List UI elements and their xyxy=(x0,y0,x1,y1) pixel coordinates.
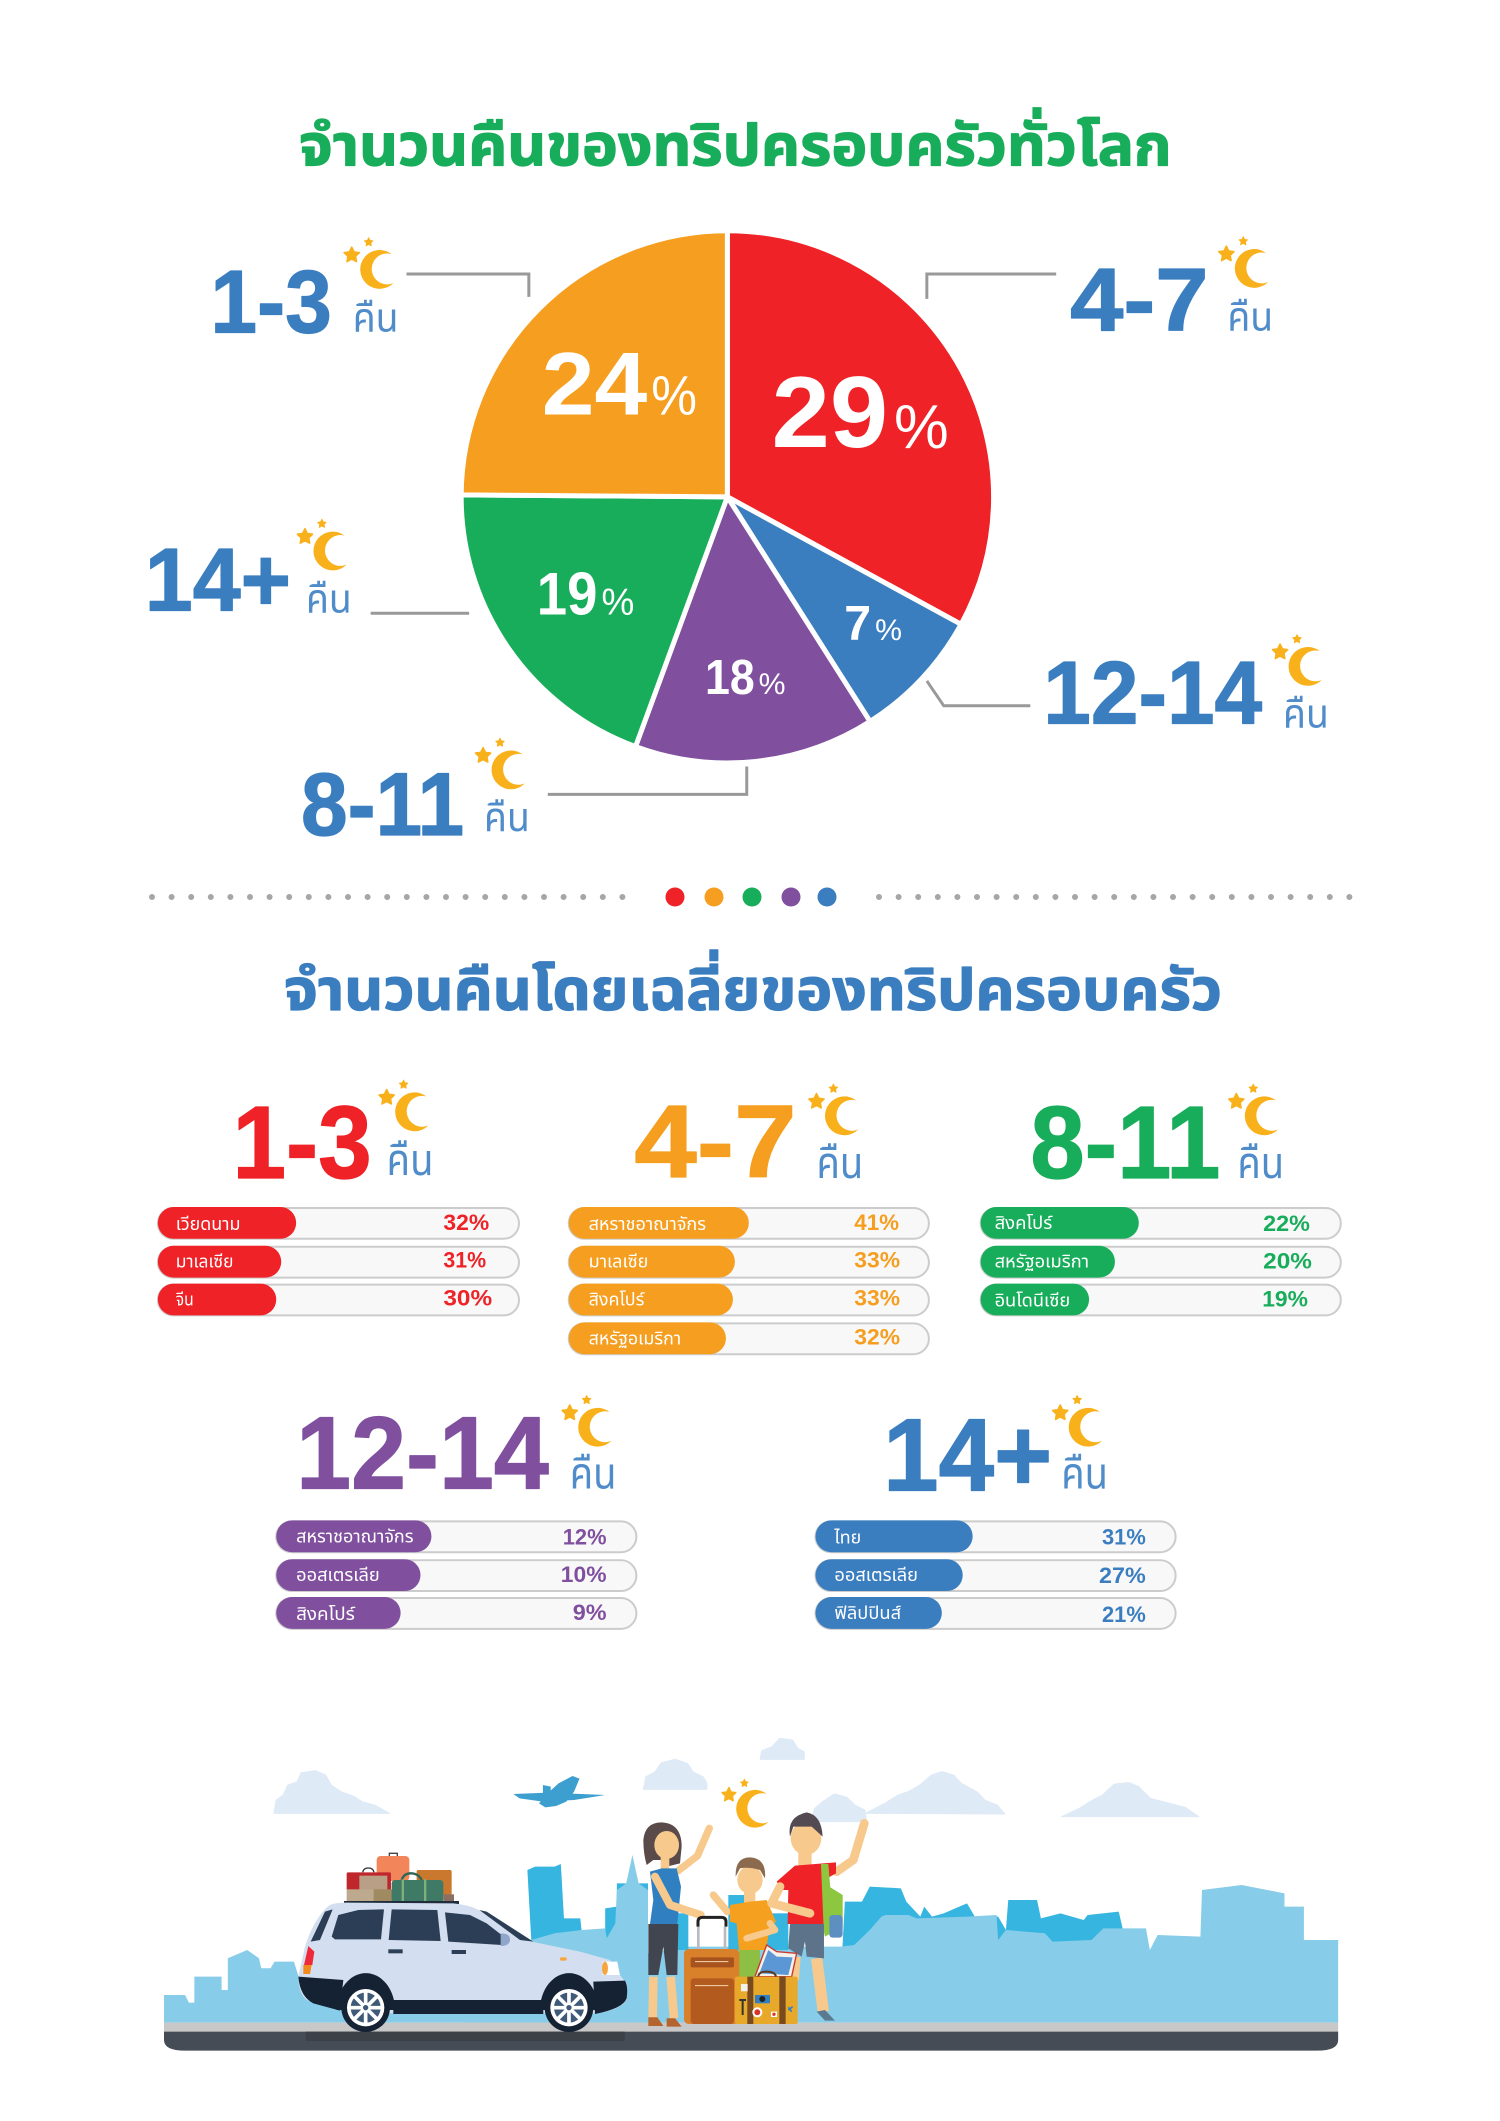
pie label: 4-7 nights xyxy=(1070,237,1273,350)
bar: USA 32% xyxy=(569,1322,929,1354)
family with suitcases xyxy=(643,1779,864,2027)
bar: Australia 10%: ออสเตรเลีย xyxy=(296,1565,380,1585)
leader line: 8-11 xyxy=(548,766,747,794)
panel: 8-11 nights countries xyxy=(981,1084,1341,1315)
road xyxy=(164,2023,1338,2051)
bar: China 30%: จีน xyxy=(175,1289,194,1309)
car bumpers and sill xyxy=(298,1977,627,2014)
heading: 4-7 nights: 4-7 xyxy=(634,1083,797,1199)
bar: Malaysia 33% xyxy=(569,1246,929,1278)
roof luggage xyxy=(344,1853,459,1906)
bar: UK 12% xyxy=(276,1520,636,1552)
pie value: 29%: 29 xyxy=(772,355,888,469)
woman xyxy=(643,1822,709,2027)
pie label: 8-11 nights: 8-11 xyxy=(301,754,464,854)
title: average nights per family trip: จำนวนคืนโดยเฉลี่ยของทริปครอบครัว xyxy=(284,949,1222,1023)
bar: Singapore 33%: สิงคโปร์ xyxy=(589,1289,645,1309)
bar: Malaysia 33%: 33% xyxy=(854,1248,900,1273)
pie label: 4-7 nights: 4-7 xyxy=(1070,250,1208,350)
bar: China 30% xyxy=(158,1284,519,1315)
bar: Indonesia 19%: 19% xyxy=(1262,1286,1308,1311)
bar: USA 20%: 20% xyxy=(1263,1249,1312,1274)
title: global family trip nights: จำนวนคืนของทริปครอบครัวทั่วโลก xyxy=(299,108,1172,179)
heading: 12-14 nights: คืน xyxy=(570,1450,617,1499)
bar: Indonesia 19% xyxy=(981,1284,1341,1315)
bar: Singapore 9% xyxy=(276,1597,636,1629)
bar: Malaysia 31%: มาเลเซีย xyxy=(176,1252,233,1272)
background buildings behind family xyxy=(677,1895,788,1950)
panel: 14+ nights countries xyxy=(815,1396,1176,1629)
car windows xyxy=(311,1909,533,1945)
yellow suitcase with map xyxy=(735,1945,798,2024)
bar: Australia 10% xyxy=(276,1559,636,1591)
skyline: light buildings xyxy=(164,1855,1338,2023)
pie value: 18%: % xyxy=(759,668,786,701)
bar: Singapore 33% xyxy=(569,1284,929,1315)
coloured divider dots xyxy=(666,888,836,906)
bar: UK 41%: สหราชอาณาจักร xyxy=(589,1214,706,1234)
pie label: 14+ nights xyxy=(145,519,352,629)
bar: Philippines 21% xyxy=(815,1597,1176,1629)
bar: Singapore 22%: สิงคโปร์ xyxy=(995,1213,1053,1233)
bar: USA 32%: 32% xyxy=(854,1324,900,1349)
man xyxy=(772,1812,864,2021)
bar: China 30%: 30% xyxy=(443,1285,492,1310)
front wheel xyxy=(540,1973,598,2032)
bar: Singapore 22%: 22% xyxy=(1263,1211,1310,1236)
heading: 8-11 nights: คืน xyxy=(1237,1139,1284,1188)
heading: 4-7 nights xyxy=(634,1083,863,1199)
bar: USA 20% xyxy=(981,1246,1341,1278)
icon: airplane xyxy=(513,1776,605,1807)
bar: UK 41%: 41% xyxy=(854,1210,899,1235)
bar: Malaysia 33%: มาเลเซีย xyxy=(589,1252,648,1272)
pie value: 29%: % xyxy=(894,393,949,462)
bar: Thailand 31%: 31% xyxy=(1102,1524,1146,1549)
pie value: 24% xyxy=(542,333,697,433)
bar: Vietnam 32%: เวียดนาม xyxy=(176,1214,240,1234)
heading: 14+ nights: 14+ xyxy=(883,1397,1052,1513)
boy xyxy=(713,1857,776,1978)
pie value: 19%: % xyxy=(601,581,634,623)
bar: Australia 10%: 10% xyxy=(561,1562,607,1587)
pie label: 12-14 nights: คืน xyxy=(1283,693,1329,737)
slice: 14+ nights 19% xyxy=(461,495,727,747)
pie label: 12-14 nights: 12-14 xyxy=(1043,643,1262,743)
illustration: family road trip scene xyxy=(164,1738,1338,2051)
pie label: 1-3 nights: 1-3 xyxy=(210,252,332,352)
bar: USA 20%: สหรัฐอเมริกา xyxy=(995,1252,1089,1272)
bar: UK 12%: 12% xyxy=(563,1524,607,1549)
bar: UK 12%: สหราชอาณาจักร xyxy=(296,1526,414,1546)
pie value: 24%: % xyxy=(651,364,697,426)
pie value: 7% xyxy=(844,597,902,651)
bar: Australia 27% xyxy=(815,1559,1176,1591)
clouds xyxy=(274,1738,1198,1822)
orange suitcase xyxy=(684,1917,739,2024)
car details xyxy=(303,1933,620,1975)
bar: Thailand 31%: ไทย xyxy=(833,1527,861,1547)
leader line: 12-14 xyxy=(927,681,1030,706)
pie label: 8-11 nights xyxy=(301,738,530,854)
pie label: 14+ nights: คืน xyxy=(306,577,352,621)
pie value: 29% xyxy=(772,355,949,469)
skyline: dark buildings xyxy=(527,1864,1123,1960)
rear wheel xyxy=(337,1973,395,2032)
bar: Singapore 9%: 9% xyxy=(573,1600,607,1625)
leader line: 1-3 xyxy=(406,274,529,297)
pie label: 1-3 nights xyxy=(210,238,399,352)
pie value: 7%: % xyxy=(875,614,902,647)
bar: Malaysia 31%: 31% xyxy=(443,1248,486,1273)
bar: Singapore 33%: 33% xyxy=(854,1285,900,1310)
bar: Philippines 21%: 21% xyxy=(1102,1602,1146,1627)
heading: 8-11 nights: 8-11 xyxy=(1030,1084,1220,1200)
bar: Singapore 22% xyxy=(981,1207,1341,1239)
heading: 4-7 nights: คืน xyxy=(816,1139,863,1188)
pie value: 19%: 19 xyxy=(537,559,598,627)
panel: 4-7 nights countries xyxy=(569,1083,929,1354)
bar: Australia 27%: ออสเตรเลีย xyxy=(834,1565,918,1585)
heading: 14+ nights: คืน xyxy=(1061,1450,1108,1499)
leader line: 4-7 xyxy=(927,274,1056,299)
bar: Indonesia 19%: อินโดนีเซีย xyxy=(995,1290,1070,1310)
heading: 1-3 nights: 1-3 xyxy=(232,1084,372,1200)
panel: 1-3 nights countries xyxy=(158,1080,519,1315)
pie value: 18% xyxy=(705,651,786,705)
bar: Thailand 31% xyxy=(815,1520,1176,1552)
bar: Vietnam 32%: 32% xyxy=(443,1210,489,1235)
slice: 8-11 nights 18% xyxy=(636,497,870,763)
panel: 12-14 nights countries xyxy=(276,1395,636,1629)
pie chart xyxy=(461,231,994,763)
pie label: 8-11 nights: คืน xyxy=(484,796,530,840)
slice: 12-14 nights 7% xyxy=(727,497,961,722)
slice: 1-3 nights 24% xyxy=(461,231,727,497)
pie label: 4-7 nights: คืน xyxy=(1227,296,1273,340)
bar: Australia 27%: 27% xyxy=(1099,1563,1146,1588)
bar: USA 32%: สหรัฐอเมริกา xyxy=(589,1328,681,1348)
pie label: 1-3 nights: คืน xyxy=(353,297,399,341)
bar: Malaysia 31% xyxy=(158,1246,519,1278)
pie value: 18%: 18 xyxy=(705,651,755,705)
car with luggage xyxy=(298,1853,627,2032)
pie value: 24%: 24 xyxy=(542,333,647,433)
pie value: 7%: 7 xyxy=(844,597,871,651)
leader line: 14+ xyxy=(371,612,469,615)
slice: 4-7 nights 29% xyxy=(727,231,994,624)
bar: Singapore 9%: สิงคโปร์ xyxy=(296,1604,356,1624)
section: country bars xyxy=(158,1080,1341,1629)
bar: UK 41% xyxy=(569,1207,929,1239)
pie label: 14+ nights: 14+ xyxy=(145,529,291,629)
icon: moon and stars xyxy=(722,1779,769,1828)
clouds, plane and skyline xyxy=(164,1738,1338,2051)
car body xyxy=(298,1903,627,2013)
pie value: 19% xyxy=(537,559,634,627)
bar: Philippines 21%: ฟิลิปปินส์ xyxy=(834,1603,901,1623)
section: pie overview xyxy=(145,108,1329,854)
heading: 1-3 nights: คืน xyxy=(387,1136,433,1185)
bar: Vietnam 32% xyxy=(158,1207,519,1239)
heading: 12-14 nights: 12-14 xyxy=(296,1395,549,1511)
